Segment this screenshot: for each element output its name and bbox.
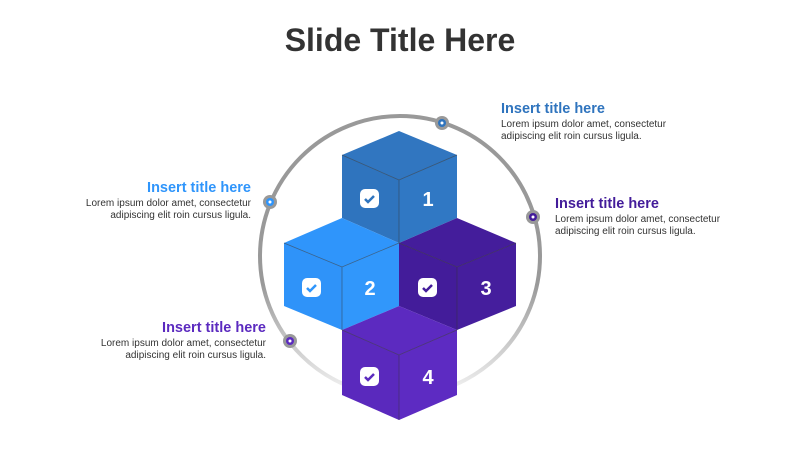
text: item 4: adipiscing elit roin cursus ligula. <box>125 350 266 361</box>
text: item 1: Lorem ipsum dolor amet, consectetur <box>501 119 666 130</box>
text: item 3 <box>555 196 720 237</box>
markers <box>263 116 540 348</box>
text: item 3: Lorem ipsum dolor amet, consectetur <box>555 214 720 225</box>
text: item 2 <box>86 180 251 221</box>
text: item 4: Insert title here <box>162 320 266 336</box>
text: item 3: adipiscing elit roin cursus ligula. <box>555 226 696 237</box>
text: item 1: adipiscing elit roin cursus ligula. <box>501 131 642 142</box>
text: item 2: Insert title here <box>147 180 251 196</box>
text: item 3: Insert title here <box>555 196 659 212</box>
text: item 4: Lorem ipsum dolor amet, consectetur <box>101 338 266 349</box>
text: item 2: adipiscing elit roin cursus ligula. <box>110 210 251 221</box>
text: item 1 <box>501 101 666 142</box>
text: item 4 <box>101 320 266 361</box>
cube 1: 1 <box>422 189 434 211</box>
cube 3 <box>399 218 516 330</box>
cube 3: 3 <box>480 278 492 300</box>
cube 4 <box>342 306 457 420</box>
text: item 2: Lorem ipsum dolor amet, consectetur <box>86 198 251 209</box>
cube 2: 2 <box>364 278 376 300</box>
ring <box>260 116 540 396</box>
title: Slide Title Here <box>285 22 515 58</box>
cube 2 <box>284 218 399 330</box>
cube 1 <box>342 131 457 243</box>
text: item 1: Insert title here <box>501 101 605 117</box>
cube 4: 4 <box>422 367 434 389</box>
